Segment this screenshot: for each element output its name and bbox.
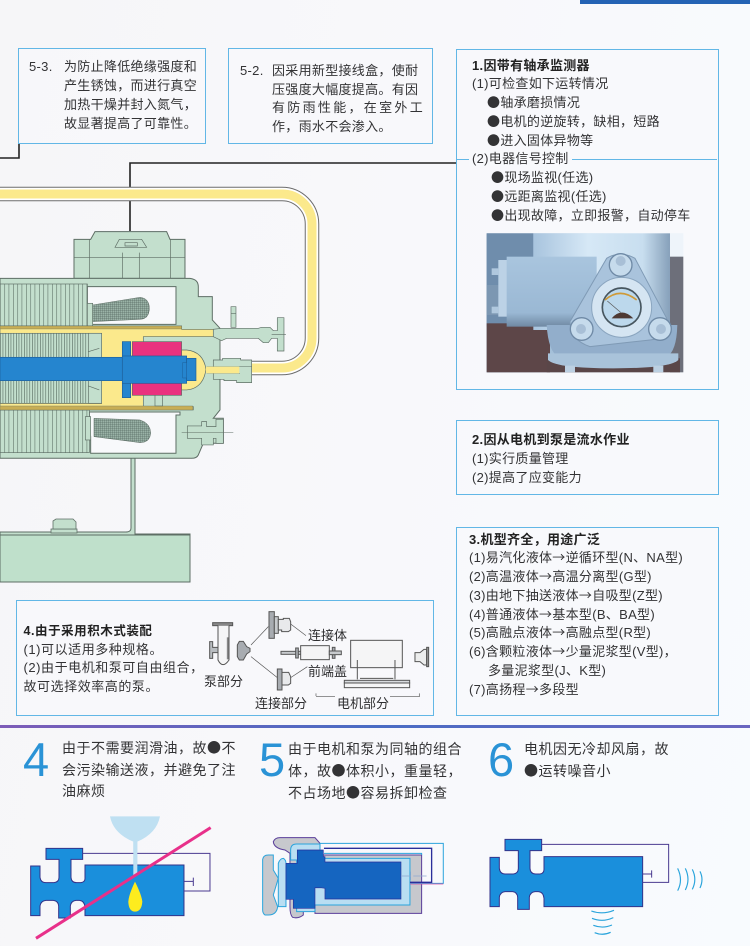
panel 4 text: 故可选择效率高的泵。 [24, 678, 159, 694]
panel 1 divider [457, 158, 717, 160]
5-2 text: 有防雨性能，在室外工 [272, 100, 425, 115]
feature 4 text: 油麻烦 [62, 783, 106, 799]
number 4: 4 [23, 733, 49, 786]
assembly labels: 泵部分 [204, 674, 243, 689]
feature 4 text [62, 738, 236, 799]
panel 4 text: 4.由于采用积木式装配 [24, 624, 152, 638]
panel 3 text: (3)由地下抽送液体→自吸型(Z型) [469, 585, 663, 604]
5-3 text [29, 59, 197, 131]
motor housing section [0, 232, 286, 458]
diagram 4: no lubrication [31, 816, 211, 938]
panel: 5-2 [228, 48, 433, 144]
assembly labels: 电机部分 [337, 696, 389, 711]
5-3 text: 加热干燥并封入氮气， [64, 97, 197, 112]
rotor shaft icon [281, 646, 341, 660]
bypass pipe [0, 194, 312, 368]
panel 1 text: ●现场监视(任选) [491, 167, 593, 186]
panel 4 text: (1)可以适用多种规格。 [24, 642, 163, 656]
panel 3 text: (6)含颗粒液体→少量泥浆型(V型)， [469, 641, 677, 660]
panel 1 text [469, 58, 691, 224]
feature 4 text: 由于不需要润滑油，故●不 [62, 738, 236, 758]
5-2 text: 因采用新型接线盒，使耐 [272, 63, 418, 78]
panel: 1 bearing monitor [456, 49, 719, 390]
feature 6 text [524, 741, 669, 781]
panel 3 text: (4)普通液体→基本型(B、BA型) [469, 604, 655, 622]
base plate and foot [0, 456, 190, 582]
5-3 text: 为防止降低绝缘强度和 [64, 59, 197, 74]
panel 2 text: (1)实行质量管理 [472, 451, 569, 466]
panel: 5-3 [18, 48, 206, 144]
panel 1 text: ●轴承磨损情况 [487, 92, 580, 111]
5-2 text: 压强度大幅度提高。有因 [272, 82, 418, 97]
5-3 text: 产生锈蚀，而进行真空 [64, 78, 197, 93]
panel 2 text: (2)提高了应变能力 [472, 470, 582, 485]
top right blue bar [580, 0, 750, 4]
panel 3 text: (2)高温液体→高温分离型(G型) [469, 566, 652, 585]
feature 5 text [288, 741, 462, 803]
feature 5 text: 不占场地●容易拆卸检查 [288, 783, 448, 803]
band divider [0, 725, 750, 728]
assembly labels: 连接部分 [255, 696, 307, 711]
5-3 text: 5-3. [29, 59, 53, 74]
number 6: 6 [488, 733, 514, 786]
diagram 6: quiet motor [490, 839, 702, 934]
panel 3 text: (1)易汽化液体→逆循环型(N、NA型) [469, 547, 683, 566]
panel: 2 [456, 420, 719, 495]
panel 3 text: (5)高融点液体→高融点型(R型) [469, 622, 651, 641]
diagram 5: coaxial [263, 838, 443, 918]
assembly labels: 前端盖 [308, 664, 347, 679]
panel 4 text: (2)由于电机和泵可自由组合， [24, 660, 204, 675]
panel 3 text [469, 532, 683, 698]
feature 4 text: 会污染输送液，并避免了注 [62, 762, 236, 778]
panel: 3 [456, 527, 719, 716]
pump part icon [210, 623, 250, 665]
panel 1 text: (1)可检查如下运转情况 [472, 76, 608, 91]
panel 3 text: 3.机型齐全，用途广泛 [469, 532, 600, 546]
5-2 text: 5-2. [240, 63, 264, 78]
feature 6 text: 电机因无冷却风扇，故 [524, 741, 669, 757]
panel 1 text: 1.因带有轴承监测器 [472, 58, 590, 72]
feature 5 text: 由于电机和泵为同轴的组合 [288, 741, 462, 757]
panel 1 text: ●进入固体异物等 [487, 130, 593, 148]
assembly labels: 连接体 [308, 628, 347, 643]
panel 1 text: ●电机的逆旋转，缺相，短路 [487, 111, 660, 130]
connector body icon [269, 612, 291, 638]
5-2 text [240, 63, 425, 134]
lower connector icon [277, 669, 291, 690]
panel 4 text [24, 624, 204, 694]
leader lines [251, 624, 419, 697]
motor part icon [344, 640, 429, 688]
feature 6 text: ●运转噪音小 [524, 761, 611, 781]
feature 5 text: 体，故●体积小，重量轻， [288, 761, 462, 781]
5-2 text: 作，雨水不会渗入。 [272, 119, 392, 134]
panel 1 text: (2)电器信号控制 [472, 151, 569, 166]
panel: 4 modular assembly [16, 600, 434, 716]
5-3 text: 故显著提高了可靠性。 [64, 116, 197, 131]
panel 1 text: ●出现故障，立即报警，自动停车 [491, 204, 691, 224]
panel 3 text: 多量泥浆型(J、K型) [488, 663, 606, 678]
number 5: 5 [259, 733, 285, 786]
panel 2 text [472, 432, 630, 485]
panel 2 text: 2.因从电机到泵是流水作业 [472, 432, 630, 447]
panel 3 text: (7)高扬程→多段型 [469, 678, 579, 698]
panel 1 text: ●远距离监视(任选) [491, 186, 607, 205]
